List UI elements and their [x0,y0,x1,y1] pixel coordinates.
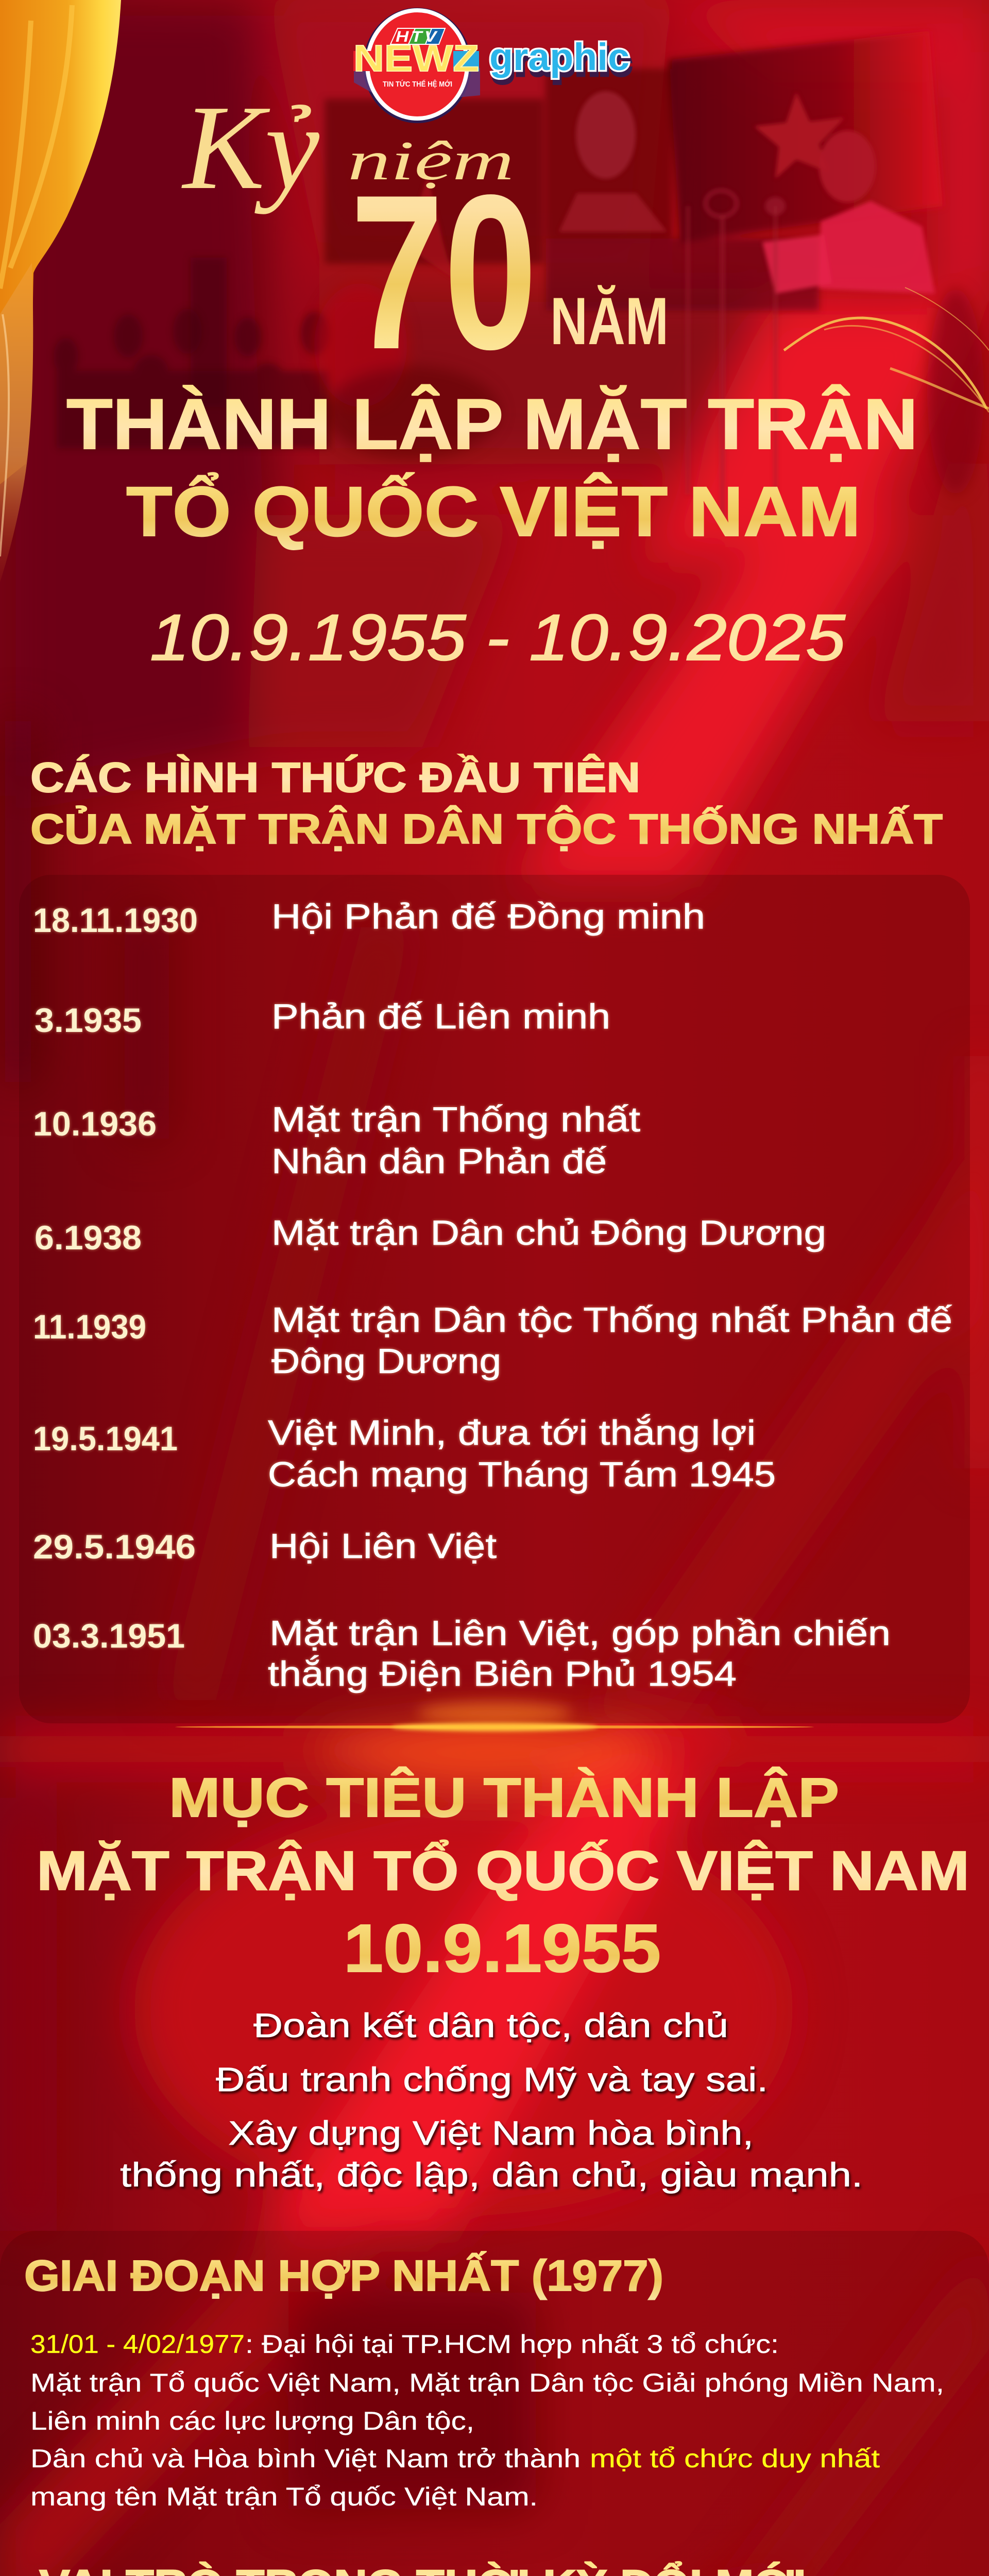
panel: timeline: Việt Minh, đưa tới thắng lợi [268,1413,756,1452]
photo: historic congress scene [54,31,984,526]
text: unification details: Liên minh các lực lượng Dân tộc, [30,2406,474,2435]
glow divider [175,1702,814,1731]
text: unification details: Mặt trận Tổ quốc Việt Nam, Mặt trận Dân tộc Giải phóng Miền Nam, [30,2368,944,2397]
NEWZ wordmark: NEWZ [353,38,479,79]
panel: timeline: Nhân dân Phản đế [271,1142,607,1181]
heading: first forms: CÁC HÌNH THỨC ĐẦU TIÊN [30,754,640,801]
text block: goals: thống nhất, độc lập, dân chủ, giàu mạnh. [120,2156,863,2194]
gold swoosh right [784,287,989,412]
panel: timeline: thắng Điện Biên Phủ 1954 [268,1654,737,1693]
panel: timeline: Hội Liên Việt [269,1527,497,1566]
panel: timeline: 18.11.1930 [33,901,198,939]
heading: first forms: CỦA MẶT TRẬN DÂN TỘC THỐNG NHẤT [30,806,943,853]
panel: timeline: 10.1936 [33,1105,157,1143]
text: unification details: : Đại hội tại TP.HCM hợp nhất 3 tổ chức: [245,2330,779,2359]
panel: timeline: 19.5.1941 [33,1419,178,1458]
text block: goals [120,2006,863,2194]
text: unification details: Dân chủ và Hòa bình Việt Nam trở thành [30,2444,581,2473]
title block: THÀNH LẬP MẶT TRẬN [66,384,918,464]
background lower waves [0,2524,989,2576]
text: unification details: 31/01 - 4/02/1977 [30,2330,245,2359]
panel: timeline: Mặt trận Dân tộc Thống nhất Phản đế [271,1300,952,1340]
heading: founding goal: MỤC TIÊU THÀNH LẬP [169,1766,839,1828]
panel: timeline: 6.1938 [35,1218,142,1257]
text block: goals: Đấu tranh chống Mỹ và tay sai. [216,2060,768,2098]
panel: timeline: Cách mạng Tháng Tám 1945 [268,1455,776,1494]
panel: timeline: 03.3.1951 [33,1617,185,1655]
panel: timeline: Mặt trận Liên Việt, góp phần chiến [269,1614,891,1653]
title block: 10.9.1955 - 10.9.2025 [150,601,845,674]
heading: first forms [30,754,943,853]
script: Kỷ niệm: niệm [348,130,514,192]
graphic wordmark: graphic [489,36,629,78]
panel: timeline: Mặt trận Dân chủ Đông Dương [271,1213,826,1252]
heading: unification 1977: GIAI ĐOẠN HỢP NHẤT (1977) [24,2251,663,2300]
logo: HTV NEWZ graphic: TIN TỨC THẾ HỆ MỚI [383,79,452,89]
panel: timeline: Mặt trận Thống nhất [271,1100,640,1139]
heading: founding goal: 10.9.1955 [344,1910,661,1986]
script: Kỷ niệm: Kỷ [181,80,320,214]
HTV badge: HTV [396,28,439,45]
title block [66,80,918,674]
panel: timeline: 29.5.1946 [33,1528,196,1566]
script: Kỷ niệm [181,80,514,214]
text: unification details [30,2330,944,2511]
big number 70: 70 [350,149,537,395]
text block: goals: Đoàn kết dân tộc, dân chủ [253,2006,728,2044]
logo: HTV NEWZ graphic [353,8,632,123]
title block: NĂM [550,283,669,359]
gold curtain [0,0,121,582]
panel: timeline: Phản đế Liên minh [271,997,610,1036]
panel: timeline: 3.1935 [35,1001,142,1039]
panel: timeline: Hội Phản đế Đồng minh [271,897,705,936]
text: unification details: mang tên Mặt trận Tổ quốc Việt Nam. [30,2482,538,2511]
panel: timeline: Đông Dương [271,1342,501,1381]
HTV badge [390,28,445,45]
title block: TỔ QUỐC VIỆT NAM [126,472,861,551]
text block: goals: Xây dựng Việt Nam hòa bình, [228,2114,754,2152]
panel: timeline [19,875,970,1723]
heading: founding goal: MẶT TRẬN TỔ QUỐC VIỆT NAM [37,1839,969,1902]
text: unification details: một tổ chức duy nhất [590,2444,880,2473]
heading: founding goal [37,1766,969,1986]
panel: timeline: 11.1939 [33,1308,146,1346]
panel: history phases [0,2231,989,2576]
graphic wordmark: graphic [491,41,632,83]
